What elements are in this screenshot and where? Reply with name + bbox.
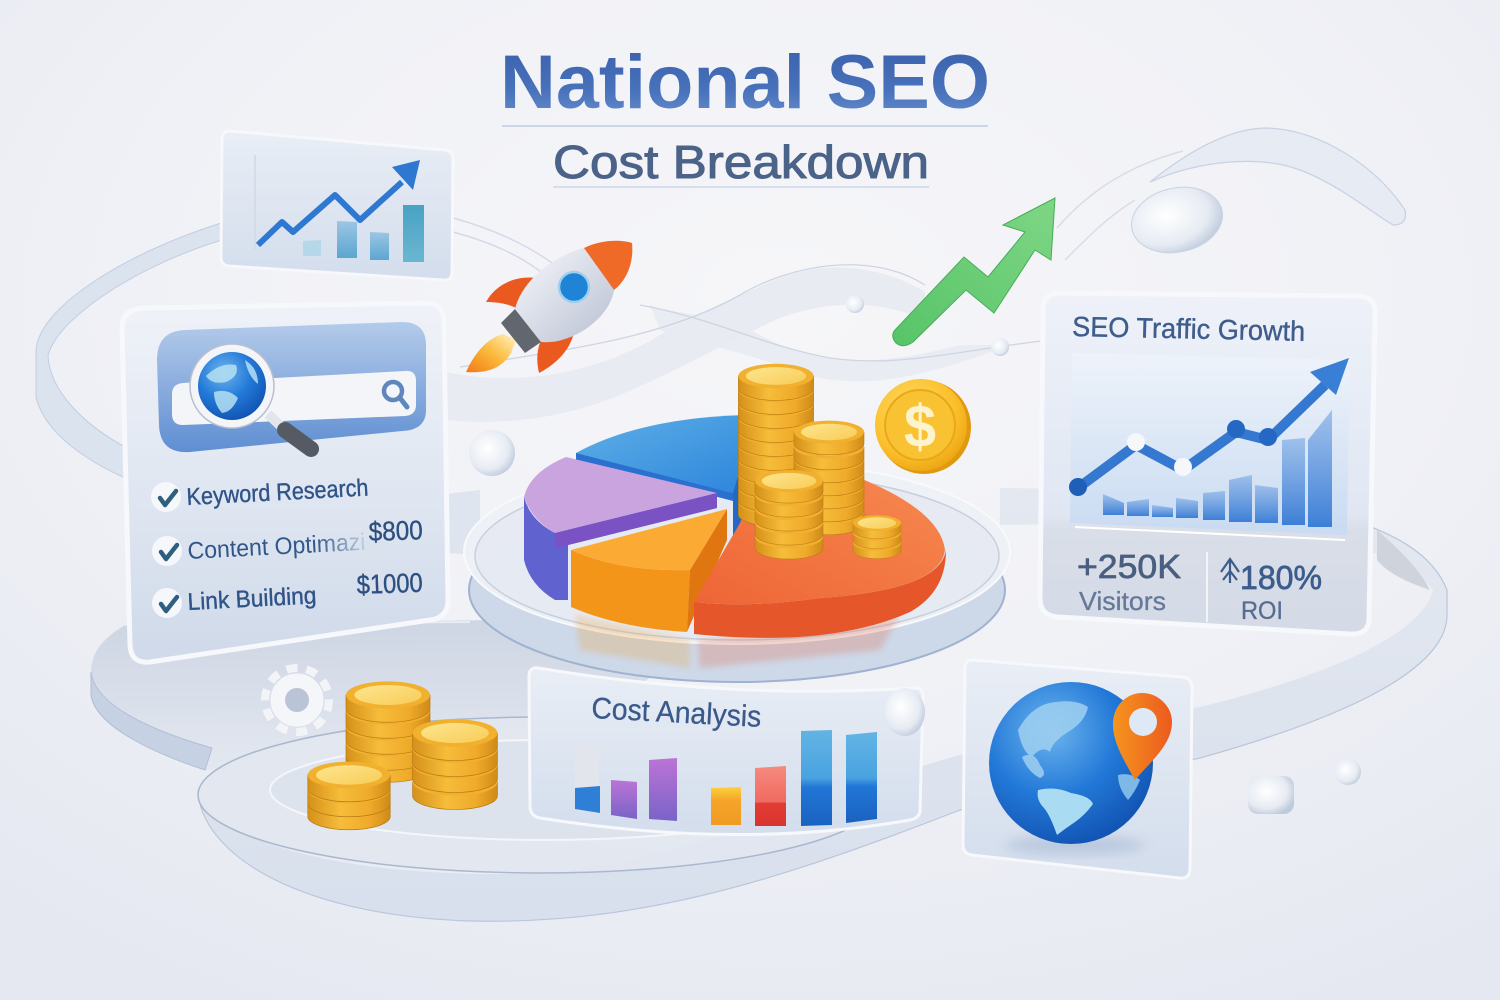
stat: +250K Visitors bbox=[1077, 548, 1181, 616]
text: SEO Traffic Growth: SEO Traffic Growth bbox=[1072, 311, 1305, 347]
slice: purple bbox=[524, 457, 717, 600]
body bbox=[515, 248, 614, 342]
stat: 180% ROI: ROI bbox=[1241, 597, 1283, 625]
small stack bbox=[853, 515, 901, 559]
text: $1000: $1000 bbox=[356, 568, 423, 600]
lower left disc bbox=[91, 620, 700, 790]
slice: red-orange bbox=[694, 470, 946, 638]
flame bbox=[466, 334, 516, 372]
text: Link Building: Link Building bbox=[187, 582, 317, 616]
bar chart bbox=[575, 730, 877, 826]
stat: +250K Visitors: +250K bbox=[1077, 548, 1181, 585]
slice: blue bbox=[576, 415, 745, 560]
slice: orange bbox=[571, 509, 727, 632]
stat: +250K Visitors: Visitors bbox=[1079, 586, 1166, 616]
icon: rocket bbox=[466, 241, 632, 373]
icon: location pin bbox=[1113, 693, 1172, 780]
upper left ring bbox=[36, 223, 222, 478]
band behind pedestal left bbox=[446, 490, 480, 555]
icon: dollar coin bbox=[875, 379, 971, 474]
water drop bbox=[885, 688, 925, 736]
pie reflection bbox=[575, 615, 900, 668]
glass pedestal bbox=[464, 460, 1010, 682]
text: Cost Analysis: Cost Analysis bbox=[591, 692, 762, 734]
glass ribbons bbox=[36, 128, 1447, 921]
front stack bbox=[308, 762, 390, 830]
back stack bbox=[346, 681, 430, 782]
upper right swoosh bbox=[1150, 128, 1406, 225]
coin stacks on pie bbox=[738, 364, 901, 559]
text: Content Optimaza: Content Optimazi bbox=[187, 529, 366, 565]
icon: green growth arrow bbox=[893, 198, 1055, 346]
line chart bbox=[1069, 353, 1350, 540]
checklist bbox=[151, 475, 423, 618]
heading: National SEO: National SEO bbox=[500, 40, 990, 125]
front stack bbox=[755, 470, 823, 559]
panel: globe with location pin bbox=[963, 660, 1192, 878]
tall stack bbox=[738, 364, 814, 526]
subheading: Cost Breakdown: Cost Breakdown bbox=[553, 136, 929, 188]
panel: SEO traffic growth bbox=[1040, 293, 1375, 634]
band connecting lower disc to right ring bbox=[198, 488, 1447, 921]
water droplets bbox=[469, 295, 1361, 814]
stat: 180% ROI: 180% bbox=[1240, 559, 1322, 596]
water droplet upper right bbox=[1125, 179, 1229, 261]
panel: keyword search card bbox=[122, 303, 448, 662]
pie chart bbox=[524, 415, 946, 638]
icon: gear bbox=[265, 668, 329, 732]
icon: magnifying glass with globe bbox=[190, 344, 311, 449]
search bar box bbox=[157, 322, 426, 452]
fins bbox=[486, 277, 537, 308]
wave bands bbox=[446, 267, 925, 422]
nozzle bbox=[501, 309, 541, 353]
nose bbox=[584, 241, 632, 290]
coin stacks lower left bbox=[308, 681, 497, 830]
stat: 180% ROI bbox=[1221, 559, 1322, 625]
middle stack bbox=[794, 421, 864, 535]
right stack bbox=[413, 719, 497, 810]
text: $800: $800 bbox=[368, 515, 423, 547]
icon: globe bbox=[989, 682, 1153, 844]
text: Keyword Research: Keyword Research bbox=[186, 475, 369, 511]
panel: small growth chart bbox=[221, 131, 453, 280]
icon: dollar coin: $ bbox=[904, 393, 936, 460]
panel: cost analysis bbox=[529, 668, 925, 835]
window bbox=[559, 272, 589, 302]
title bbox=[500, 40, 990, 188]
lower glass disc bbox=[198, 717, 882, 873]
